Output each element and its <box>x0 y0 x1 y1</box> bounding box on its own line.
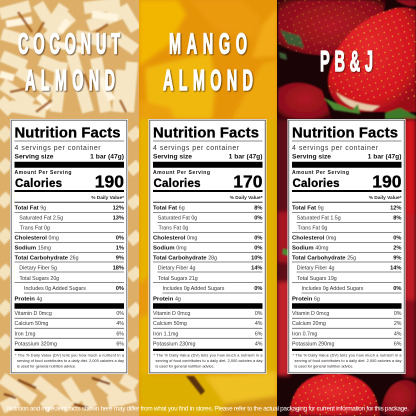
nutrition label: coconut almond <box>10 119 128 374</box>
nutrition label: mango almond: Saturated Fat 0g <box>158 215 197 221</box>
nutrition label: mango almond: Cholesterol 0mg <box>153 236 197 242</box>
nutrition label: pb&j: 2% <box>394 321 402 327</box>
title: mango almond <box>163 27 253 96</box>
nutrition label: mango almond: 4% <box>255 321 263 327</box>
nutrition label: coconut almond: Dietary Fiber 5g <box>19 266 57 272</box>
nutrition label: coconut almond: Total Sugars 20g <box>20 276 59 282</box>
nutrition label: pb&j: 4 servings per container <box>292 145 379 152</box>
nutrition label: pb&j: Calories <box>292 178 340 190</box>
nutrition label: pb&j: serving of food contributes to a daily diet. 2,000 calories a day <box>294 359 402 363</box>
nutrition label: pb&j: Saturated Fat 1.5g <box>297 215 341 221</box>
nutrition label: coconut almond: serving of food contributes to a daily diet. 2,000 calories a day <box>17 359 124 363</box>
nutrition label: coconut almond: 9% <box>116 256 124 262</box>
nutrition label: coconut almond: 0% <box>116 311 124 317</box>
title: coconut almond: ALMOND <box>25 63 115 96</box>
nutrition label: pb&j: Includes 0g Added Sugars <box>302 286 364 292</box>
nutrition label: mango almond: 1 bar (47g) <box>229 153 262 160</box>
nutrition label: coconut almond: Total Fat 9g <box>14 205 46 211</box>
nutrition label: mango almond: 0% <box>254 236 262 242</box>
nutrition label: pb&j: 4% <box>394 331 402 337</box>
nutrition label: pb&j: % Daily Value* <box>369 195 402 201</box>
nutrition label: mango almond: 8% <box>254 205 262 211</box>
nutrition label: mango almond: Total Carbohydrate 28g <box>153 256 217 262</box>
nutrition label: mango almond: serving of food contributes to a daily diet. 2,000 calories a day <box>156 359 263 363</box>
nutrition label: coconut almond: * The % Daily Value (DV) tells you how much a nutrient in a <box>15 354 125 358</box>
title: coconut almond: COCONUT <box>18 27 120 60</box>
nutrition label: mango almond: 6% <box>255 331 263 337</box>
nutrition label: mango almond: Potassium 230mg <box>153 341 195 347</box>
nutrition label: mango almond: Total Fat 6g <box>153 205 185 211</box>
nutrition label: coconut almond: Total Carbohydrate 26g <box>14 256 79 262</box>
nutrition label: mango almond: 170 <box>233 172 263 192</box>
nutrition label: pb&j: Potassium 290mg <box>292 341 334 347</box>
nutrition label: pb&j: Sodium 40mg <box>292 246 329 252</box>
title: mango almond: ALMOND <box>163 63 253 96</box>
nutrition label: pb&j: 12% <box>390 205 402 211</box>
nutrition label: coconut almond: Calcium 50mg <box>14 321 48 327</box>
nutrition label: mango almond <box>148 119 266 374</box>
nutrition label: coconut almond: 4 servings per container <box>14 145 101 152</box>
nutrition label: mango almond: 0% <box>254 215 262 221</box>
nutrition label: coconut almond: is used for general nutrition advice. <box>17 364 76 368</box>
nutrition label: coconut almond: Sodium 15mg <box>14 246 51 252</box>
nutrition label: pb&j: is used for general nutrition advice. <box>294 364 354 368</box>
nutrition label: coconut almond: Nutrition Facts <box>14 126 120 142</box>
nutrition label: mango almond: Iron 1.1mg <box>153 331 178 337</box>
nutrition label: pb&j: * The % Daily Value (DV) tells you how much a nutrient in a <box>292 354 402 358</box>
title: pb&j: PB&J <box>320 44 373 77</box>
nutrition label: mango almond: Protein 4g <box>153 296 181 302</box>
nutrition label: coconut almond: 4% <box>116 321 124 327</box>
nutrition label: pb&j: 1 bar (47g) <box>368 153 402 160</box>
nutrition label: pb&j: Serving size <box>292 153 331 160</box>
nutrition label: mango almond: 0% <box>255 311 263 317</box>
nutrition label: mango almond: Calcium 50mg <box>153 321 187 327</box>
nutrition label: pb&j: Vitamin D 0mcg <box>292 311 329 317</box>
nutrition label: mango almond: % Daily Value* <box>230 195 263 201</box>
panel: pb&j background <box>277 0 416 416</box>
nutrition label: pb&j: Total Fat 9g <box>292 205 324 211</box>
nutrition label: coconut almond: Includes 0g Added Sugars <box>24 286 86 292</box>
nutrition label: coconut almond: Saturated Fat 2.5g <box>19 215 63 221</box>
nutrition label: mango almond: 4 servings per container <box>153 145 240 152</box>
nutrition label: pb&j: Cholesterol 0mg <box>292 236 336 242</box>
nutrition label: mango almond: 0% <box>254 246 262 252</box>
nutrition label: pb&j <box>288 119 406 374</box>
nutrition label: pb&j: Protein 6g <box>292 296 320 302</box>
nutrition label: pb&j: Calcium 20mg <box>292 321 326 327</box>
nutrition label: pb&j: 9% <box>393 256 402 262</box>
nutrition label: pb&j: Nutrition Facts <box>292 126 398 142</box>
nutrition label: coconut almond: 6% <box>116 341 124 347</box>
nutrition label: pb&j: 8% <box>393 215 402 221</box>
nutrition label: pb&j: 6% <box>394 341 402 347</box>
panel: mango almond background <box>139 0 277 416</box>
nutrition label: coconut almond: Vitamin D 0mcg <box>14 311 52 317</box>
nutrition label: mango almond: Amount Per Serving <box>153 170 210 176</box>
nutrition label: coconut almond: 0% <box>116 236 124 242</box>
nutrition label: mango almond: 4% <box>255 341 263 347</box>
nutrition label: pb&j: 0% <box>394 311 402 317</box>
nutrition label: mango almond: Includes 0g Added Sugars <box>162 286 225 292</box>
nutrition label: pb&j: 2% <box>393 246 402 252</box>
nutrition label: mango almond: Serving size <box>153 153 192 160</box>
nutrition label: coconut almond: 6% <box>116 331 124 337</box>
nutrition label: coconut almond: Amount Per Serving <box>14 170 72 176</box>
nutrition label: pb&j: Dietary Fiber 4g <box>297 266 335 272</box>
nutrition label: pb&j: Amount Per Serving <box>292 170 349 176</box>
nutrition label: coconut almond: Serving size <box>14 153 54 160</box>
nutrition label: coconut almond: Protein 4g <box>14 296 42 302</box>
nutrition label: coconut almond: 190 <box>95 172 124 192</box>
nutrition label: mango almond: Sodium 0mg <box>153 246 187 252</box>
nutrition label: mango almond: Trans Fat 0g <box>158 226 188 232</box>
disclaimer text: Nutrition and ingredient facts shown here may differ from what you find in stores. Please refer to the actual packaging for current information for this package. <box>7 406 409 412</box>
nutrition label: mango almond: Vitamin D 0mcg <box>153 311 190 317</box>
nutrition label: mango almond: Calories <box>154 178 200 190</box>
nutrition label: coconut almond: 12% <box>113 205 124 211</box>
nutrition label: coconut almond: 0% <box>116 286 124 292</box>
nutrition label: coconut almond: 13% <box>113 215 124 221</box>
panel: coconut almond background <box>0 0 139 416</box>
nutrition label: coconut almond: 18% <box>113 266 124 272</box>
nutrition label: pb&j: Trans Fat 0g <box>298 226 327 232</box>
nutrition label: mango almond: Nutrition Facts <box>153 126 259 142</box>
nutrition label: mango almond: 0% <box>254 286 262 292</box>
title: coconut almond <box>18 27 120 96</box>
title: mango almond: MANGO <box>169 27 247 60</box>
nutrition label: mango almond: Dietary Fiber 4g <box>158 266 196 272</box>
nutrition label: coconut almond: Potassium 320mg <box>14 341 57 347</box>
nutrition label: mango almond: Total Sugars 21g <box>158 276 198 282</box>
nutrition label: coconut almond: Trans Fat 0g <box>20 226 50 232</box>
nutrition label: mango almond: is used for general nutrition advice. <box>156 364 214 368</box>
nutrition label: mango almond: * The % Daily Value (DV) tells you how much a nutrient in a <box>154 354 263 358</box>
nutrition label: coconut almond: Iron 1mg <box>14 331 35 337</box>
nutrition label: mango almond: 10% <box>251 256 262 262</box>
nutrition label: pb&j: 190 <box>372 172 402 192</box>
nutrition label: pb&j: 0% <box>393 286 402 292</box>
nutrition label: coconut almond: 1 bar (47g) <box>90 153 124 160</box>
nutrition label: pb&j: Total Carbohydrate 25g <box>292 256 356 262</box>
nutrition label: pb&j: 0% <box>393 236 402 242</box>
nutrition label: coconut almond: 1% <box>116 246 124 252</box>
nutrition label: coconut almond: % Daily Value* <box>91 195 124 201</box>
nutrition label: pb&j: Total Sugars 19g <box>297 276 337 282</box>
nutrition label: pb&j: 14% <box>390 266 402 272</box>
nutrition label: mango almond: 14% <box>251 266 262 272</box>
nutrition label: pb&j: Iron 0.7mg <box>292 331 317 337</box>
nutrition label: coconut almond: Calories <box>15 178 62 190</box>
nutrition label: coconut almond: Cholesterol 0mg <box>14 236 59 242</box>
